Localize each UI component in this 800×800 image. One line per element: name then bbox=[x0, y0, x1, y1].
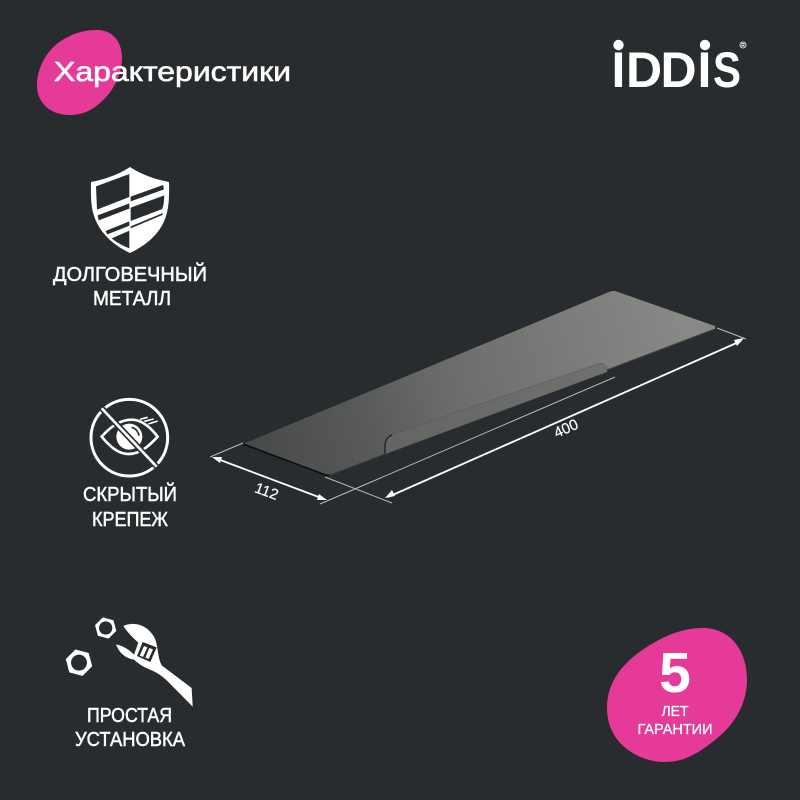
label: ПРОСТАЯ УСТАНОВКА bbox=[75, 705, 186, 751]
label: ПРОСТАЯ УСТАНОВКА: ПРОСТАЯ bbox=[87, 705, 172, 727]
dimension: 400 bbox=[320, 328, 746, 504]
mounting bracket bbox=[385, 364, 607, 454]
label: ДОЛГОВЕЧНЫЙ МЕТАЛЛ: МЕТАЛЛ bbox=[93, 288, 171, 310]
dimension: 112 bbox=[210, 443, 392, 504]
heading text: Характеристики bbox=[54, 56, 291, 87]
shelf front edge bbox=[243, 444, 330, 475]
label: СКРЫТЫЙ КРЕПЕЖ: КРЕПЕЖ bbox=[92, 509, 168, 531]
nut lower bbox=[66, 649, 92, 676]
number 5: 5 bbox=[659, 641, 691, 705]
dimension: 112: 112 bbox=[252, 480, 281, 504]
pink blob behind heading bbox=[37, 30, 122, 115]
pink blob bbox=[607, 628, 747, 762]
logo: IDDIS: R bbox=[741, 43, 745, 49]
guarantee text: ЛЕТ bbox=[662, 703, 688, 720]
icon: shield bbox=[91, 167, 169, 253]
nut upper bbox=[95, 617, 116, 639]
label: ДОЛГОВЕЧНЫЙ МЕТАЛЛ: ДОЛГОВЕЧНЫЙ bbox=[53, 262, 207, 286]
dimension: 400: 400 bbox=[551, 416, 581, 442]
icon: wrench and nuts bbox=[66, 617, 193, 707]
label: СКРЫТЫЙ КРЕПЕЖ bbox=[83, 482, 177, 531]
heading: Характеристики bbox=[37, 30, 291, 115]
logo: IDDIS: IDDI bbox=[612, 42, 711, 98]
product: shelf bbox=[243, 291, 715, 475]
logo: IDDIS: S bbox=[713, 42, 741, 98]
badge: 5 лет гарантии: ГАРАНТИИ bbox=[638, 721, 712, 738]
label: ПРОСТАЯ УСТАНОВКА: УСТАНОВКА bbox=[75, 729, 186, 751]
icon: crossed-out eye bbox=[91, 399, 168, 476]
badge: 5 лет гарантии bbox=[607, 628, 747, 762]
label: СКРЫТЫЙ КРЕПЕЖ: СКРЫТЫЙ bbox=[83, 482, 177, 506]
wrench bbox=[116, 624, 193, 707]
label: ДОЛГОВЕЧНЫЙ МЕТАЛЛ bbox=[53, 262, 207, 310]
shelf top surface bbox=[243, 291, 715, 475]
